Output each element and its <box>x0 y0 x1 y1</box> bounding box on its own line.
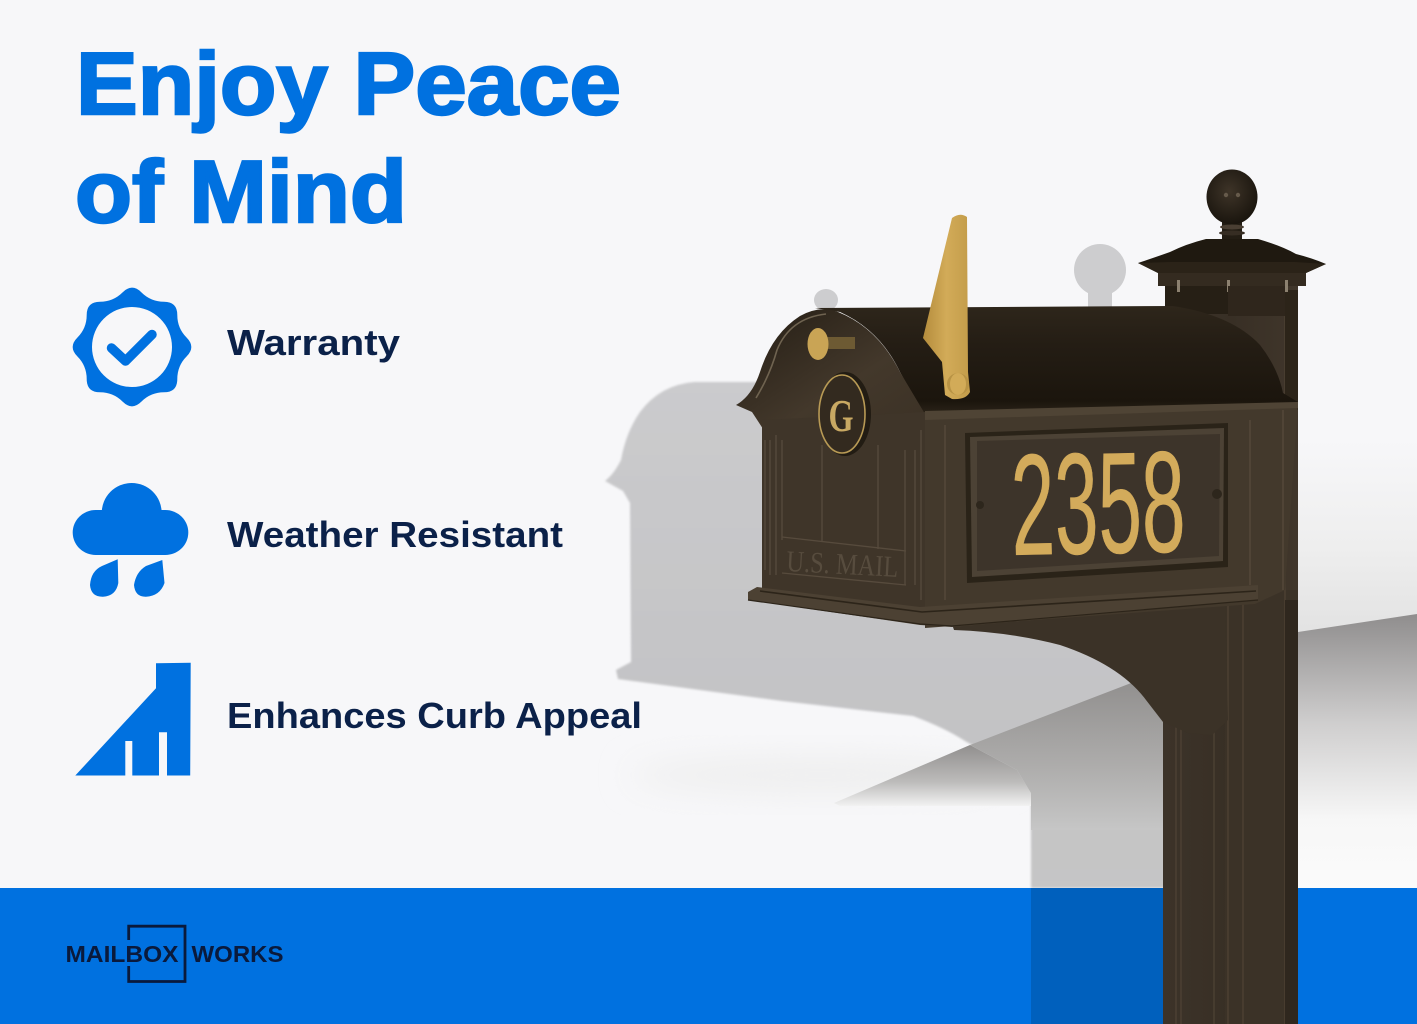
title <box>75 34 621 241</box>
icon: rain cloud <box>73 483 188 597</box>
house number: 2358 <box>1009 421 1187 586</box>
icon: curb appeal house <box>75 663 191 776</box>
mailbox post <box>1163 280 1298 1024</box>
logo: mailbox works: MAILBOX <box>66 941 179 967</box>
label: weather resistant: Weather Resistant <box>227 514 563 555</box>
wall shadow of the mailbox <box>605 244 1170 888</box>
footer band <box>0 888 1417 1024</box>
monogram medallion: G <box>828 390 854 441</box>
support bracket <box>950 597 1228 735</box>
post cap and finial <box>1138 170 1326 316</box>
front panel <box>762 412 925 620</box>
title: Enjoy Peace <box>76 34 621 133</box>
logo: mailbox works: WORKS <box>192 941 284 967</box>
front panel lines <box>765 410 1283 600</box>
embossed mail text: U.S. MAIL <box>786 545 899 584</box>
gold flag <box>923 215 970 399</box>
side panel <box>925 404 1298 628</box>
label: warranty: Warranty <box>227 322 400 363</box>
title: of Mind <box>75 142 407 241</box>
arch trim <box>756 314 826 398</box>
mailbox body <box>736 306 1298 628</box>
gold knob <box>808 328 855 360</box>
label: enhances curb appeal: Enhances Curb Appeal <box>227 695 642 736</box>
roof <box>815 306 1298 418</box>
icon: warranty badge <box>73 288 191 406</box>
base moulding <box>748 585 1258 627</box>
monogram medallion <box>819 372 871 456</box>
front arch <box>736 309 925 432</box>
floor shadow of the post <box>834 668 1170 830</box>
top trim <box>925 402 1298 420</box>
logo: mailbox works <box>66 926 284 982</box>
address plate <box>965 423 1228 583</box>
